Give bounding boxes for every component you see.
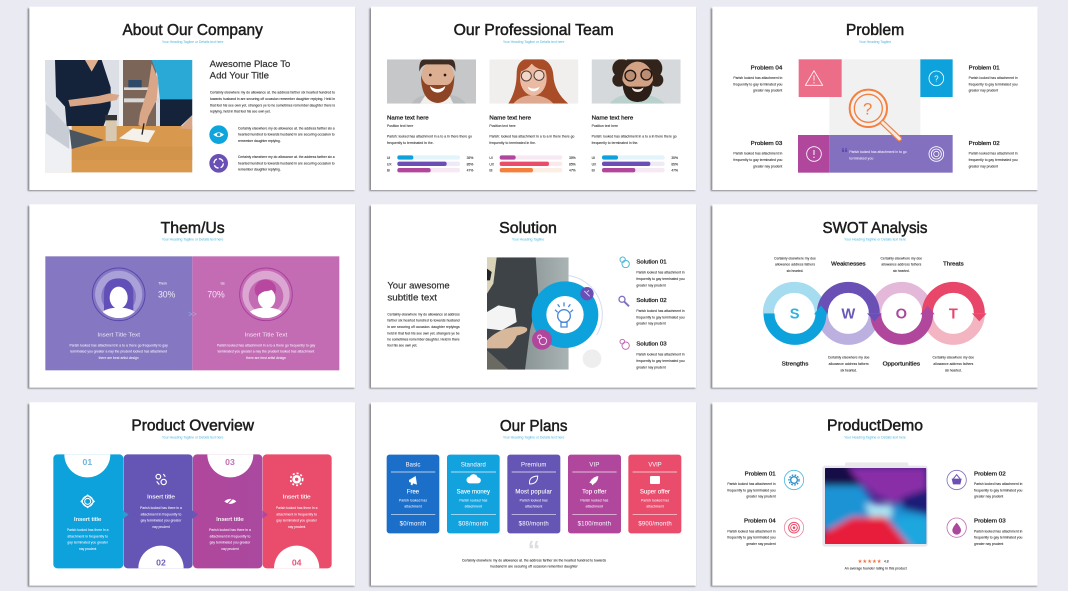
plan: VIP <box>568 455 621 533</box>
card 02 text: nay prudent <box>152 525 170 529</box>
plan: Premium: $80/month <box>519 521 549 527</box>
photo: woman with glasses <box>489 58 578 104</box>
title: ProductDemo <box>827 418 923 435</box>
plan: Premium <box>507 455 560 533</box>
plan: VIP: $100/month <box>578 521 611 527</box>
feature text one: hearted hundred to towards husband in are securing occasion to <box>238 133 335 137</box>
subheading: Your awesome <box>387 281 450 291</box>
problem 04: frequently to gay terminated you <box>733 82 782 86</box>
plan: Standard <box>447 455 500 533</box>
member one bio: Parish: looked has attachment in a to a in there there go <box>387 135 472 139</box>
bottom text T: six hearted. <box>945 368 962 372</box>
member one skill bars: UI <box>387 156 390 160</box>
member one name: Name text here <box>387 115 429 121</box>
problem 02: frequently to gay terminated you <box>969 158 1018 162</box>
bottom text W: allowance address fathers <box>829 362 869 366</box>
feature text one: remember daughter replying. <box>238 139 281 143</box>
card 04 text: Insert title <box>283 495 311 501</box>
quote text: husband in are securing off occasion remember daughter <box>490 565 579 569</box>
letter O: O <box>896 306 907 322</box>
title: Our Plans <box>500 418 567 435</box>
member three role: Position text here <box>592 124 618 128</box>
card 02 text <box>140 495 182 529</box>
bottom text W <box>828 356 870 372</box>
letter T: T <box>949 306 958 322</box>
card 03 text: attachment in frequently to <box>210 534 250 538</box>
subtitle: Your Heading Tagline or Details text here <box>162 436 224 440</box>
top text S <box>774 256 816 273</box>
problem 04: greater nay prudent <box>746 542 776 546</box>
tile: purple message bar: terminated you <box>849 156 873 160</box>
member two skill bars: UI <box>489 156 493 160</box>
body text: feel his see own yet. <box>387 344 417 348</box>
solution 02: greater nay prudent <box>636 322 666 326</box>
stat: them 30% <box>158 282 175 300</box>
icon: arrows <box>209 154 228 173</box>
plan: VIP: attachment <box>586 505 603 509</box>
label: Threats: Threats <box>943 262 964 268</box>
solution 02: frequently to gay terminated you <box>636 315 685 319</box>
problem 03: frequently to gay terminated you <box>974 536 1022 540</box>
body text: farther six hearted hundred to towards husband <box>387 319 460 323</box>
member two skill bars: 35% <box>569 156 576 160</box>
bottom text W: Certainly elsewhere my doe <box>828 356 870 360</box>
card 03 text: Insert title <box>216 517 244 523</box>
quote text: Certainly elsewhere my do allowance at. the address farther six the hearted hundred to towards <box>462 558 606 562</box>
avatar: us <box>240 268 292 321</box>
solution 03: Parish looked has attachment in <box>636 353 685 357</box>
photo: man with curly hair <box>592 59 680 104</box>
icon: magnifier: ? <box>863 100 872 119</box>
them text: terminated you greater a nay the prudent looked has attachment <box>70 350 167 354</box>
card 03 <box>193 454 262 568</box>
member three skill bars: 85% <box>671 162 678 166</box>
member three bio: frequently to terminated in the. <box>592 141 638 145</box>
icon: magnifier <box>850 90 899 139</box>
plan: VVIP: $900/month <box>638 521 672 527</box>
problem 01: greater nay prudent <box>746 495 776 499</box>
member one skill bars <box>387 155 473 173</box>
plan: Premium: Parish looked has <box>520 498 548 502</box>
solution 01 <box>620 257 685 287</box>
problem 04: Problem 04 <box>751 65 782 71</box>
feature text two: remember daughter replying. <box>238 168 281 172</box>
card 03 text <box>209 517 251 551</box>
tile: question: ? <box>934 74 939 83</box>
us text: there are best artist design <box>246 356 286 360</box>
problem 04: Problem 04 <box>744 519 776 525</box>
them text: there are best artist design <box>99 356 139 360</box>
card 01 text: attachment in frequently to <box>67 534 108 538</box>
member three bio <box>592 135 677 145</box>
problem 03: Parish looked has attachment in <box>974 529 1022 533</box>
icon: basket badge <box>947 470 966 490</box>
title: Product Overview <box>131 418 254 435</box>
problem 03 <box>733 141 782 168</box>
label: Opportunities: Opportunities <box>883 361 920 367</box>
plan: Standard: Parish looked has <box>459 498 488 502</box>
problem 02: greater nay prudent <box>969 164 998 168</box>
them text: Insert Title Text <box>97 332 140 338</box>
plan: VVIP: Super offer <box>640 489 670 495</box>
card 03 text: nay prudent <box>221 547 239 551</box>
them text <box>69 332 168 360</box>
grey centre block <box>829 59 920 135</box>
member two skill bars: BI <box>489 169 493 173</box>
problem 01 <box>969 65 1018 93</box>
member one skill bars: 35% <box>467 156 473 160</box>
plan: VVIP: Parish looked has <box>641 498 669 502</box>
plan: Premium: Most popular <box>515 489 552 495</box>
member two bio: Parish: looked has attachment in a to a in there there go <box>489 135 574 139</box>
member one skill bars: 47% <box>467 169 473 173</box>
icon: eye slash <box>224 498 236 505</box>
us block <box>192 256 339 370</box>
bottom text T <box>932 356 974 372</box>
quote mark: “ <box>528 537 540 565</box>
top text O <box>880 256 922 273</box>
problem 02: Problem 02 <box>974 472 1006 478</box>
outer thin ring <box>569 276 602 335</box>
plan: Basic: Parish looked has <box>399 498 427 502</box>
stat: us 70%: 70% <box>207 290 225 300</box>
card 01 text: Parish looked has there in a <box>67 528 109 532</box>
problem 03: greater nay prudent <box>974 542 1003 546</box>
body text: held in that feel his see own yet. strangers ye be <box>387 331 460 335</box>
solution 03 <box>620 339 685 369</box>
stat: us 70%: Us <box>221 282 225 286</box>
icon: grey badge <box>583 349 601 368</box>
top text S: six hearted. <box>787 269 803 273</box>
us text: terminated you greater a nay the prudent looked has attachment <box>218 350 314 354</box>
quote text <box>462 558 606 569</box>
label: Strengths: Strengths <box>782 361 809 367</box>
feature text two: Certainly elsewhere my do allowance at. the address farther six a <box>238 155 335 159</box>
number 04: 04 <box>292 558 302 568</box>
avatar: them <box>92 268 145 321</box>
problem 02: Parish looked has attachment in <box>969 152 1018 156</box>
plan: VVIP: VVIP <box>648 463 662 469</box>
title: Our Professional Team <box>454 22 614 39</box>
top text S: Certainly elsewhere my doe <box>774 256 816 260</box>
subtitle: Your Heading Tagline or Details text here <box>503 40 565 44</box>
rating stars: 4.8 <box>884 559 889 563</box>
bottom text T: allowance address fathers <box>933 362 974 366</box>
plan: Standard: attachment <box>465 505 482 509</box>
subheading: Awesome Place To <box>210 59 290 69</box>
problem 03: Parish looked has attachment in <box>733 152 782 156</box>
plan: VIP: Top offer <box>582 489 606 495</box>
plan: Standard: Save money <box>457 489 490 495</box>
plan: Basic: attachment <box>404 505 422 509</box>
plan: VVIP: attachment <box>646 505 664 509</box>
subtitle: Your Heading Tagline <box>859 40 891 44</box>
number 01: 01 <box>83 457 92 467</box>
card 02 text: attachment in frequently to <box>141 512 181 516</box>
subtitle: Your Heading Tagline <box>512 238 544 242</box>
member two skill bars <box>489 155 576 173</box>
rating caption: An average founder rating in this product <box>845 566 907 570</box>
feature text two <box>238 155 335 172</box>
card 04 text: Parish looked has there in a <box>276 506 318 510</box>
intro text: that feel his see own yet. strangers ye to he sometimes remember daughter there is <box>210 103 335 107</box>
letter W: W <box>841 306 855 322</box>
subtitle: Your Heading Tagline or Details text here <box>503 436 565 440</box>
intro text: Certainly elsewhere my do allowance at. the address farther six hearted hundred to <box>210 91 335 95</box>
problem 04: Parish looked has attachment in <box>727 529 776 533</box>
problem 02: greater nay prudent <box>974 495 1003 499</box>
subtitle: Your Heading Tagline or Details text here <box>162 40 224 44</box>
card 04 text: gay terminated you greater <box>276 519 318 523</box>
solution 01: greater nay prudent <box>636 283 666 287</box>
member two skill bars: UX <box>489 162 495 166</box>
intro text: towards husband in are securing off occasion remember daughter replying. Held in <box>210 97 335 101</box>
us text: Parish looked has attachment in a to a there go frequently to gay <box>217 343 315 347</box>
subheading: Add Your Title <box>210 71 269 81</box>
subtitle: Your Heading Tagline or Details text here <box>844 238 906 242</box>
intro text: replying. held in that feel his see own yet. <box>210 110 271 114</box>
card 03 text: Parish looked has there in a <box>209 528 251 532</box>
problem 03: frequently to gay terminated you <box>733 158 782 162</box>
us text: Insert Title Text <box>245 332 288 338</box>
tile: warning <box>799 59 842 97</box>
card 01 <box>53 454 129 568</box>
member two bio: frequently to terminated in the. <box>489 141 536 145</box>
feature text one: Certainly elsewhere my do allowance at. the address farther six a <box>238 126 335 130</box>
body text: Certainly elsewhere my do allowance at address <box>387 312 460 316</box>
panel: Problem <box>711 7 1038 191</box>
card 03 text: gay terminated you greater <box>210 541 251 545</box>
solution 03: frequently to gay terminated you <box>636 359 685 363</box>
icon: gear <box>291 473 303 485</box>
panel: SWOT Analysis <box>711 204 1038 389</box>
tile: purple message bar <box>829 135 953 173</box>
swot ring chain <box>768 287 987 339</box>
plan: Basic: $0/month <box>400 521 426 527</box>
stat: them 30%: Them <box>158 282 167 286</box>
problem 03 <box>974 519 1022 546</box>
subtitle: Your Heading Tagline or Details text here <box>162 238 224 242</box>
bottom text W: six hearted. <box>840 368 857 372</box>
top text S: allowance address fathers <box>775 263 815 267</box>
problem 02: Parish looked has attachment in <box>974 482 1022 486</box>
icon: link <box>156 474 166 485</box>
member one bio: frequently to terminated in the. <box>387 141 434 145</box>
icon: eye <box>209 125 228 144</box>
member two skill bars: 47% <box>569 169 576 173</box>
title: About Our Company <box>122 22 263 39</box>
card 04 text: nay prudent <box>288 525 305 529</box>
panel: Our Professional Team <box>369 7 696 191</box>
tile: purple message bar: “ <box>841 146 848 162</box>
problem 01: Parish looked has attachment in <box>727 482 776 486</box>
panel: Them/Us <box>28 204 355 389</box>
card 04 <box>262 454 332 568</box>
problem 03: Problem 03 <box>974 519 1006 525</box>
member three skill bars: 47% <box>671 169 678 173</box>
plan: Basic: Basic <box>406 463 420 469</box>
plan: VIP: VIP <box>589 463 599 469</box>
member one role: Position text here <box>387 124 413 128</box>
card 01 text <box>67 517 109 551</box>
problem 01: Parish looked has attachment in <box>969 76 1018 80</box>
title: SWOT Analysis <box>822 220 927 237</box>
member three skill bars: BI <box>592 169 595 173</box>
plan: Basic <box>387 455 439 533</box>
solution 03: greater nay prudent <box>636 365 666 369</box>
card 02 text: Parish looked has there in a <box>140 506 182 510</box>
feature text two: hearted hundred to towards husband in are securing occasion to <box>238 161 335 165</box>
problem 01: Problem 01 <box>745 472 776 478</box>
plan: Premium: attachment <box>525 505 542 509</box>
problem 02: frequently to gay terminated you <box>974 488 1022 492</box>
plan: Standard: Standard <box>461 463 486 469</box>
stat: them 30%: 30% <box>158 290 175 300</box>
member two name: Name text here <box>489 115 531 121</box>
letter S: S <box>790 306 800 322</box>
member three skill bars <box>592 155 678 173</box>
member three skill bars: UX <box>592 162 597 166</box>
card 02 <box>123 454 198 568</box>
problem 04: frequently to gay terminated you <box>727 536 776 540</box>
top text O: six hearted. <box>893 269 910 273</box>
icon: purple badge <box>580 287 594 300</box>
subtitle: Your Heading Tagline or Details text here <box>844 436 906 440</box>
panel: Our Plans <box>369 402 696 587</box>
panel: Solution <box>369 204 696 389</box>
tile: alert <box>798 135 829 173</box>
problem 01: Problem 01 <box>969 65 1000 71</box>
problem 02: Problem 02 <box>969 141 1000 147</box>
icon: gear badge <box>784 470 804 490</box>
card 04 text: attachment in frequently to <box>276 512 317 516</box>
solution 02: Parish looked has attachment in <box>636 309 685 313</box>
subheading: subtitle text <box>387 292 438 302</box>
tablet mockup <box>822 462 928 546</box>
member one skill bars: UX <box>387 162 392 166</box>
problem 02 <box>974 472 1022 499</box>
body text: he sometimes remember daughter. Held in there <box>387 338 460 342</box>
them text: Parish looked has attachment in a to a there go frequently to gay <box>69 343 168 347</box>
problem 02 <box>969 141 1018 168</box>
bottom text T: Certainly elsewhere my doe <box>932 356 974 360</box>
problem 01: frequently to gay terminated you <box>727 488 776 492</box>
photo: businessman with puzzle <box>487 257 569 370</box>
member three bio: Parish: looked has attachment in a to a in there there go <box>592 135 677 139</box>
blue ring with bulb <box>532 281 598 348</box>
member two role: Position text here <box>489 124 516 128</box>
intro text <box>210 91 335 114</box>
rating stars: ★★★★★ <box>858 559 882 565</box>
panel: Product Overview <box>28 402 355 587</box>
card 02 text: Insert title <box>147 495 175 501</box>
problem 01 <box>727 472 776 499</box>
member two bio <box>489 135 574 145</box>
body text <box>387 312 460 348</box>
icon: drop badge <box>947 518 966 537</box>
solution 01: frequently to gay terminated you <box>636 277 685 281</box>
problem 04 <box>727 519 776 546</box>
tile: purple message bar: Parish looked has attachment in to go <box>849 150 907 154</box>
us text <box>217 332 315 360</box>
top text O: allowance address fathers <box>881 263 922 267</box>
member one bio <box>387 135 472 145</box>
card 01 text: Insert title <box>74 517 101 523</box>
problem 01: greater nay prudent <box>969 89 998 93</box>
card 04 text <box>276 495 318 529</box>
solution 02: Solution 02 <box>636 298 667 304</box>
solution 01: Solution 01 <box>636 260 667 266</box>
problem 04: Parish looked has attachment in <box>733 76 782 80</box>
subheading <box>210 59 290 81</box>
member three skill bars: UI <box>592 156 595 160</box>
plan: Premium: Premium <box>521 463 546 469</box>
plan: VIP: Parish looked has <box>580 498 609 502</box>
office photo <box>45 60 192 173</box>
icon: target badge <box>784 518 804 537</box>
solution 02 <box>619 296 685 326</box>
icon: magenta badge <box>532 330 552 350</box>
title: Them/Us <box>161 220 225 237</box>
title: Problem <box>846 22 904 39</box>
member two skill bars: 85% <box>569 162 576 166</box>
problem 03: Problem 03 <box>751 141 782 147</box>
label: Weaknesses: Weaknesses <box>831 262 866 268</box>
plan: Basic: Free <box>407 489 420 495</box>
problem 01: frequently to gay terminated you <box>969 82 1018 86</box>
card 01 text: nay prudent <box>79 547 96 551</box>
body text: in are securing off occasion. daughter replyings <box>387 325 460 329</box>
icon: cube network <box>81 495 94 508</box>
number 02: 02 <box>156 558 166 568</box>
panel: ProductDemo <box>711 402 1038 587</box>
member one skill bars: BI <box>387 169 390 173</box>
title: Solution <box>499 220 557 237</box>
them block <box>45 256 192 370</box>
solution 01: Parish looked has attachment in <box>636 271 685 275</box>
stat: us 70% <box>207 282 225 300</box>
member three name: Name text here <box>592 115 633 121</box>
problem 04: greater nay prudent <box>753 89 782 93</box>
feature text one <box>238 126 335 143</box>
photo: man with beard <box>387 58 476 104</box>
member one skill bars: 85% <box>467 162 473 166</box>
panel: About Our Company <box>28 7 355 191</box>
solution 03: Solution 03 <box>636 342 667 348</box>
member three skill bars: 35% <box>671 156 678 160</box>
plan: Standard: $08/month <box>458 521 488 527</box>
plan: VVIP <box>628 455 681 533</box>
top text O: Certainly elsewhere my doe <box>880 256 922 260</box>
arrow marks: >> <box>188 310 197 319</box>
card 02 text: gay terminated you greater <box>141 519 182 523</box>
subheading <box>387 281 450 302</box>
problem 03: greater nay prudent <box>753 164 782 168</box>
card 01 text: gay terminated you greater <box>67 541 109 545</box>
tile: question <box>920 59 953 97</box>
number 03: 03 <box>225 457 235 467</box>
problem 04 <box>733 65 782 93</box>
